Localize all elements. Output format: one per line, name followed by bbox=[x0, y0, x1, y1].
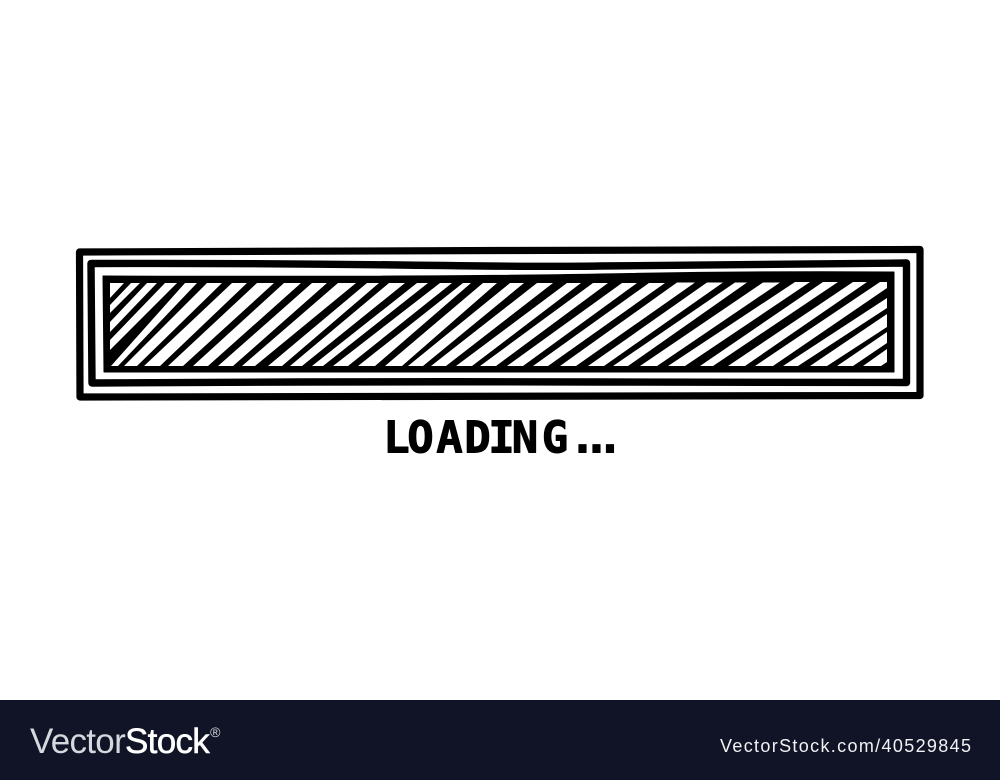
progress bar bbox=[80, 250, 920, 397]
loading label: LOADING... bbox=[383, 412, 623, 464]
diagonal stripes bbox=[110, 282, 887, 366]
footer band bbox=[0, 700, 1000, 780]
outer frame bbox=[80, 250, 920, 397]
inner filled bar bbox=[103, 272, 894, 372]
footer logo: ® bbox=[210, 724, 221, 740]
footer logo: VectorStock bbox=[30, 722, 209, 761]
middle frame bbox=[91, 263, 906, 383]
footer image id: VectorStock.com/40529845 bbox=[720, 736, 971, 756]
